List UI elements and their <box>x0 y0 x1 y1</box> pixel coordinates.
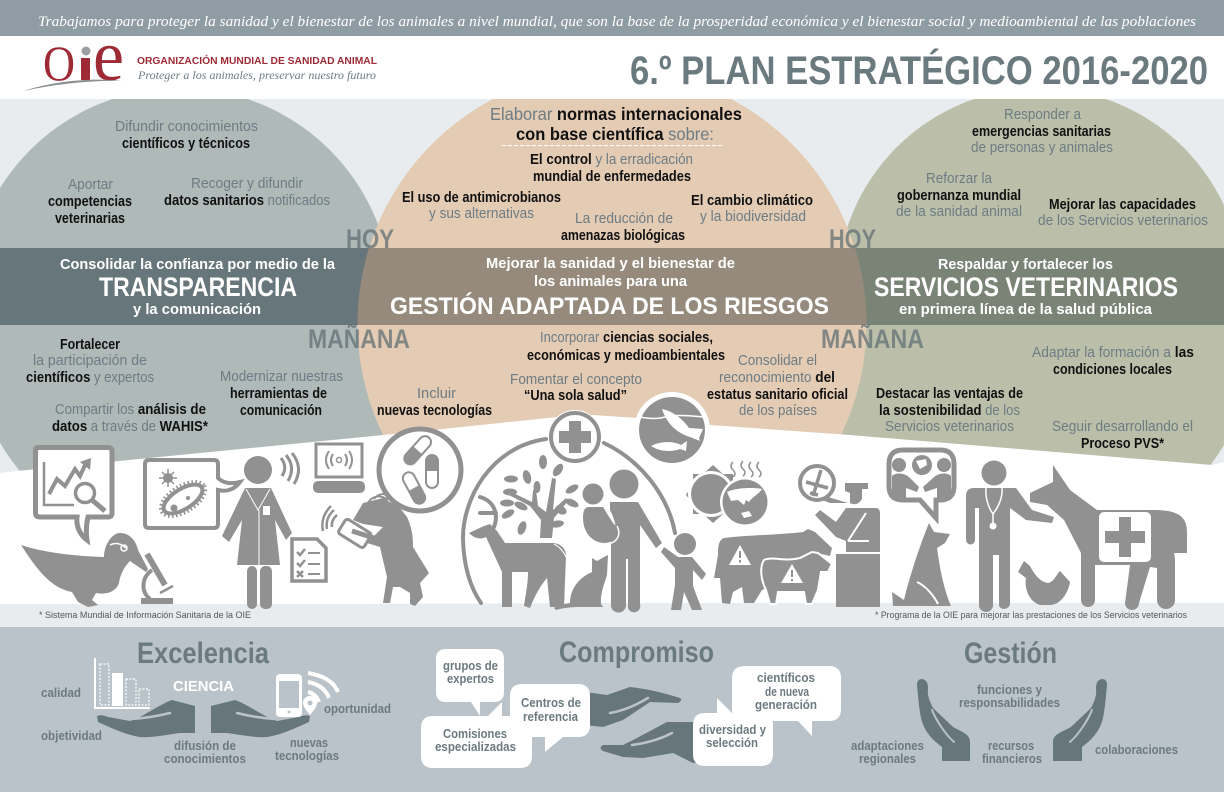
text block: right dome today: de personas y animales <box>971 139 1113 156</box>
organisation name: ORGANIZACIÓN MUNDIAL DE SANIDAD ANIMAL <box>137 54 378 67</box>
callout: diversidad y selección: selección <box>706 735 758 750</box>
callout: grupos de expertos: expertos <box>447 671 494 686</box>
labels: excelencia: oportunidad <box>324 701 391 716</box>
icon: horse with medical blanket <box>1030 465 1187 610</box>
text block: left dome today <box>48 118 330 227</box>
panel: right dome <box>841 99 1224 465</box>
callout: grupos de expertos <box>436 649 504 716</box>
icon: duck with microscope <box>21 533 173 607</box>
callout: diversidad y selección: diversidad y <box>699 722 767 737</box>
text block: left dome today: datos sanitarios notificados <box>164 192 330 209</box>
callout: diversidad y selección <box>693 698 773 766</box>
labels: gestión: funciones y <box>977 682 1043 697</box>
icon: right cupped hand <box>1053 679 1107 761</box>
labels: excelencia: tecnologías <box>275 748 339 763</box>
icon: fish circle <box>634 392 710 468</box>
text block: centre dome today: y la biodiversidad <box>700 208 806 225</box>
text block: right tomorrow: Proceso PVS* <box>1081 435 1164 452</box>
icon: sun and earth <box>686 461 770 527</box>
band text: transparencia: y la comunicación <box>133 301 261 318</box>
labels: gestión: regionales <box>859 751 916 766</box>
text block: left dome today: veterinarias <box>55 210 125 227</box>
text block: centre tomorrow: reconocimiento del <box>719 369 835 386</box>
band text: transparencia <box>60 256 336 318</box>
icon: phone and wifi <box>276 673 338 717</box>
panel: Gestión <box>851 637 1178 766</box>
text block: centre tomorrow: nuevas tecnologías <box>377 402 492 419</box>
labels: excelencia: nuevas <box>290 735 328 750</box>
icon: goat with phone <box>322 494 429 606</box>
text block: centre tomorrow <box>377 329 848 419</box>
footnote strip <box>0 604 1224 627</box>
text block: centre dome today: Elaborar normas internacionales <box>490 104 742 124</box>
text block: centre tomorrow: económicas y medioambientales <box>527 347 725 364</box>
callout: centros de referencia: Centros de <box>521 695 581 710</box>
labels: excelencia: objetividad <box>41 728 102 743</box>
band text: gestión de riesgos: GESTIÓN ADAPTADA DE LOS RIESGOS <box>390 292 829 320</box>
icon: cat <box>554 555 608 610</box>
band text: gestión de riesgos: Mejorar la sanidad y el bienestar de <box>486 255 735 272</box>
text block: left dome today: científicos y técnicos <box>122 135 250 152</box>
band text: transparencia: TRANSPARENCIA <box>99 272 297 302</box>
text block: centre tomorrow: Incorporar ciencias sociales, <box>540 329 713 346</box>
text block: left tomorrow: datos a través de WAHIS* <box>52 418 208 435</box>
icon: globe speech bubble <box>889 450 954 518</box>
icon: laptop <box>313 444 365 493</box>
text block: right tomorrow: la sostenibilidad de los <box>879 402 1020 419</box>
HOY / MAÑANA labels: MAÑANA <box>308 323 410 354</box>
icon: family <box>582 470 706 613</box>
band text: servicios veterinarios: SERVICIOS VETERINARIOS <box>874 272 1178 302</box>
callout: comisiones especializadas: especializadas <box>435 739 516 754</box>
icon: chart speech bubble <box>36 448 112 540</box>
top banner: Trabajamos para proteger la sanidad y el bienestar de los animales a nivel mundial, que son la base de la prosperidad económica y el bienestar social y medioambiental de las poblaciones <box>38 14 1196 30</box>
icon: woman scientist <box>222 453 299 609</box>
panel: Excelencia <box>41 637 391 766</box>
icon: veterinarian <box>966 460 1054 612</box>
text block: left tomorrow: comunicación <box>240 402 322 419</box>
header <box>0 16 1224 99</box>
text block: left tomorrow: Modernizar nuestras <box>220 368 343 385</box>
text block: centre dome today: La reducción de <box>575 210 673 227</box>
HOY / MAÑANA labels: MAÑANA <box>821 323 924 354</box>
icon: customs officer <box>800 466 880 607</box>
text block: centre dome today: El control y la erradicación <box>530 151 693 168</box>
text block: left tomorrow: Fortalecer <box>60 336 120 353</box>
callout: centros de referencia: referencia <box>523 709 579 724</box>
text block: left tomorrow: herramientas de <box>230 385 327 402</box>
band text: gestión de riesgos: los animales para una <box>534 273 688 290</box>
callout: grupos de expertos: grupos de <box>443 658 498 673</box>
text block: left tomorrow: Compartir los análisis de <box>55 401 206 418</box>
icon: pills circle <box>379 429 461 511</box>
icon: lower hand <box>600 722 697 763</box>
text block: centre tomorrow: Incluir <box>417 385 456 402</box>
text block: right tomorrow: Adaptar la formación a las <box>1032 344 1194 361</box>
tagline: Proteger a los animales, preservar nuestro futuro <box>137 70 376 82</box>
label: ciencia: CIENCIA <box>173 678 234 695</box>
icon: bar chart <box>95 658 150 708</box>
text block: right dome today <box>896 106 1208 229</box>
text block: left tomorrow: científicos y expertos <box>26 369 154 386</box>
text block: left dome today: Difundir conocimientos <box>115 118 258 135</box>
callout: científicos de nueva generación: científicos <box>757 670 815 685</box>
callout: científicos de nueva generación <box>732 666 841 736</box>
labels: gestión <box>851 682 1178 766</box>
text block: centre tomorrow: de los países <box>739 402 817 419</box>
HOY / MAÑANA labels: HOY <box>829 224 876 254</box>
callout: científicos de nueva generación: generación <box>755 697 817 712</box>
text block: right dome today: de la sanidad animal <box>896 203 1022 220</box>
labels: gestión: financieros <box>982 751 1042 766</box>
logo: OIE: O <box>43 35 75 91</box>
text block: centre dome today: con base científica sobre: <box>516 124 714 144</box>
text block: left dome today: Aportar <box>68 176 113 193</box>
callout: comisiones especializadas: Comisiones <box>443 726 507 741</box>
logo: OIE <box>24 16 124 96</box>
labels: gestión: colaboraciones <box>1095 742 1178 757</box>
labels: gestión: recursos <box>988 738 1034 753</box>
band text: servicios veterinarios <box>874 256 1178 318</box>
icon: left hand <box>97 700 195 737</box>
footnote: PVS: * Programa de la OIE para mejorar las prestaciones de los Servicios veterinarios <box>875 610 1187 620</box>
text block: centre tomorrow: Fomentar el concepto <box>510 371 642 388</box>
heading: Compromiso: Compromiso <box>559 636 714 669</box>
text block: right dome today: Reforzar la <box>926 170 993 187</box>
icon: right hand <box>211 700 310 737</box>
icon: deer <box>469 497 566 608</box>
text block: centre dome today <box>402 104 813 244</box>
text block: right dome today: de los Servicios veterinarios <box>1038 212 1208 229</box>
icon: upper hand <box>585 687 681 727</box>
band text: servicios veterinarios: Respaldar y fortalecer los <box>938 256 1113 273</box>
icon: clipboard <box>292 539 326 581</box>
text block: centre dome today: y sus alternativas <box>429 205 534 222</box>
panel: values footer <box>0 627 1224 792</box>
HOY / MAÑANA labels <box>308 224 924 354</box>
central band <box>0 248 1224 325</box>
text block: left tomorrow <box>26 336 343 435</box>
labels: excelencia: conocimientos <box>164 751 246 766</box>
text block: right tomorrow: Seguir desarrollando el <box>1052 418 1193 435</box>
text block: centre dome today: El uso de antimicrobianos <box>402 189 561 206</box>
panel: Compromiso <box>421 636 841 768</box>
icon: tree <box>500 455 580 538</box>
labels: gestión: responsabilidades <box>959 695 1060 710</box>
labels: excelencia <box>41 685 391 766</box>
labels: excelencia: calidad <box>41 685 81 700</box>
heading: Excelencia: Excelencia <box>137 637 269 670</box>
text block: centre dome today: El cambio climático <box>691 192 813 209</box>
callout: científicos de nueva generación: de nueva <box>765 684 810 699</box>
panel: centre dome <box>358 99 866 435</box>
icon: hen <box>1018 561 1070 605</box>
white landscape <box>0 415 1224 605</box>
text block: centre tomorrow: “Una sola salud” <box>524 387 627 404</box>
band text: servicios veterinarios: en primera línea de la salud pública <box>899 301 1153 318</box>
text block: left dome today: competencias <box>48 193 132 210</box>
text block: right tomorrow: Servicios veterinarios <box>885 418 1014 435</box>
domes background <box>0 70 1224 578</box>
text block: left dome today: Recoger y difundir <box>191 175 303 192</box>
text block: right tomorrow: condiciones locales <box>1053 361 1172 378</box>
text block: right dome today: emergencias sanitarias <box>972 123 1111 140</box>
icon: dog <box>892 523 951 606</box>
text block: right tomorrow: Destacar las ventajas de <box>876 385 1023 402</box>
logo: OIE: e <box>93 16 124 96</box>
icon: cow and sheep <box>714 529 832 604</box>
labels: excelencia: difusión de <box>174 738 236 753</box>
text block: right tomorrow <box>876 344 1194 452</box>
HOY / MAÑANA labels: HOY <box>346 224 394 254</box>
band text: gestión de riesgos <box>390 255 829 320</box>
text block: centre tomorrow: Consolidar el <box>738 352 817 369</box>
text block: centre dome today: mundial de enfermedades <box>533 168 691 185</box>
text block: right dome today: Responder a <box>1004 106 1082 123</box>
text block: left tomorrow: la participación de <box>33 352 147 369</box>
heading: Gestión: Gestión <box>964 637 1057 670</box>
callout: centros de referencia <box>510 684 590 752</box>
text block: centre dome today: amenazas biológicas <box>561 227 685 244</box>
text block: right dome today: gobernanza mundial <box>897 187 1021 204</box>
text block: right dome today: Mejorar las capacidades <box>1049 196 1196 213</box>
top banner <box>0 0 1224 36</box>
icon: left cupped hand <box>917 679 970 761</box>
footnote: WAHIS: * Sistema Mundial de Información Sanitaria de la OIE <box>39 610 251 620</box>
icon: health arc with plus <box>463 410 675 603</box>
text block: centre tomorrow: estatus sanitario oficial <box>707 386 848 403</box>
icon: bacteria speech bubble <box>145 460 240 528</box>
labels: gestión: adaptaciones <box>851 738 924 753</box>
band text: transparencia: Consolidar la confianza por medio de la <box>60 256 336 273</box>
callout: comisiones especializadas <box>421 702 532 768</box>
panel: left dome <box>0 99 383 471</box>
